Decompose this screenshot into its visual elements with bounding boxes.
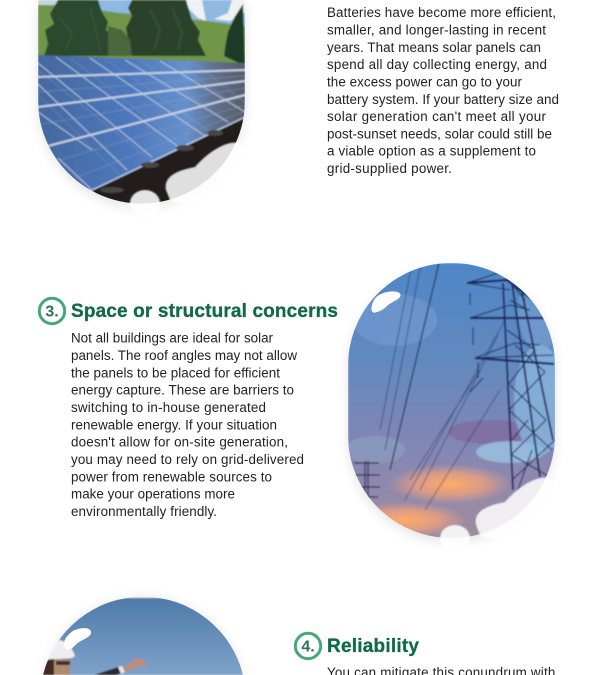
highlight blob: [373, 293, 399, 311]
text block: space paragraph: switching to in-house generated: [71, 400, 266, 415]
number badge 4: 4.: [301, 638, 315, 656]
text block: batteries paragraph: a viable option as a supplement to: [327, 144, 536, 158]
number badge 3: [39, 298, 65, 324]
cloud blobs: [130, 143, 244, 216]
text block: batteries paragraph: grid-supplied power.: [327, 161, 452, 176]
text block: batteries paragraph: Batteries have become more efficient,: [327, 5, 556, 20]
text block: batteries paragraph: smaller, and longer-lasting in recent: [327, 22, 546, 38]
cloud blobs: [440, 478, 554, 551]
text block: batteries paragraph: the excess power can go to your: [327, 74, 523, 90]
number badge 4: [295, 633, 321, 659]
text block: batteries paragraph: [327, 5, 559, 176]
text block: batteries paragraph: years. That means solar panels can: [327, 40, 541, 55]
text block: space paragraph: renewable energy. If your situation: [71, 418, 277, 432]
text block: batteries paragraph: spend all day collecting energy, and: [327, 57, 547, 72]
photo: solar panels in a field: [38, 0, 245, 216]
text block: space paragraph: power from renewable sources to: [71, 470, 272, 484]
text block: batteries paragraph: solar generation can't meet all your: [327, 109, 547, 124]
text block: space paragraph: doesn't allow for on-site generation,: [71, 434, 288, 450]
text block: space paragraph: make your operations more: [71, 486, 235, 502]
text block: space paragraph: energy capture. These are barriers to: [71, 382, 294, 398]
text block: space paragraph: the panels to be placed for efficient: [71, 366, 280, 380]
photo: transmission tower at sunset: [343, 263, 566, 551]
text block: batteries paragraph: battery system. If your battery size and: [327, 92, 559, 107]
text block: space paragraph: you may need to rely on grid-delivered: [71, 452, 304, 467]
text block: space paragraph: Not all buildings are ideal for solar: [71, 330, 274, 346]
heading: space or structural concerns: Space or structural concerns: [71, 301, 338, 322]
text block: batteries paragraph: post-sunset needs, solar could still be: [327, 126, 552, 142]
text block: space paragraph: panels. The roof angles may not allow: [71, 348, 297, 363]
text block: space paragraph: [71, 330, 304, 519]
highlight blob: [65, 629, 90, 649]
photo: engineer in hard hat pointing: [38, 597, 248, 675]
number badge 3: 3.: [45, 304, 59, 320]
text block: space paragraph: environmentally friendly.: [71, 504, 217, 519]
heading: reliability: Reliability: [327, 636, 419, 657]
